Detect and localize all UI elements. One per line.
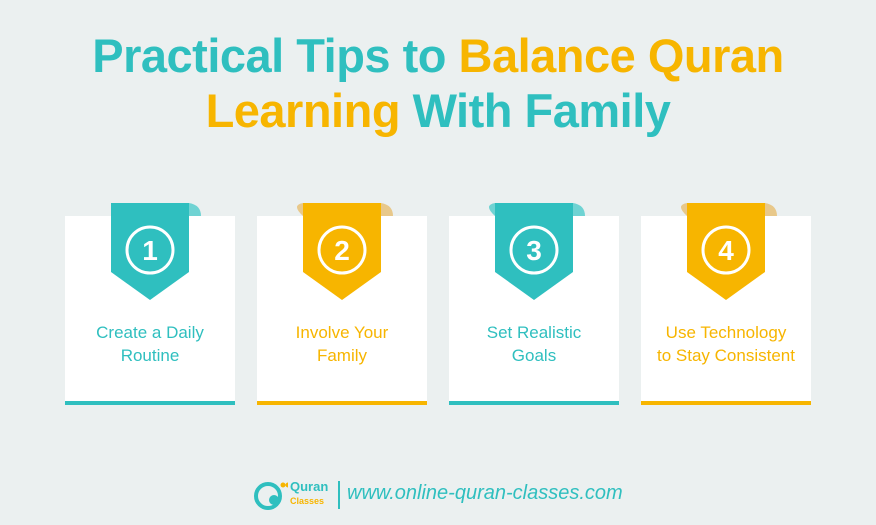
logo text: Classes [290, 496, 324, 506]
ribbon 2: 2 [334, 235, 350, 266]
card 4: to Stay Consistent [657, 346, 795, 365]
ribbon 3 [489, 203, 585, 300]
logo text [290, 479, 328, 506]
card 4 [641, 203, 811, 405]
url: www.online-quran-classes.com [347, 482, 623, 504]
card 2: Involve Your [296, 323, 388, 342]
card 1: Routine [121, 346, 179, 365]
card 1 [65, 203, 235, 405]
logo icon [254, 482, 288, 510]
card 3: Goals [512, 346, 556, 365]
logo text: Quran [290, 479, 328, 494]
card 2 [257, 203, 427, 405]
title: Practical Tips to Balance Quran [92, 29, 784, 82]
ribbon 4 [681, 203, 777, 300]
title: Learning With Family [206, 84, 670, 137]
title [92, 29, 784, 137]
card 3 [449, 203, 619, 405]
card 1: Create a Daily [96, 323, 204, 342]
footer logo and url [254, 479, 623, 510]
card 2: Family [317, 346, 367, 365]
card 3: Set Realistic [487, 323, 581, 342]
ribbon 3: 3 [526, 235, 542, 266]
card 4: Use Technology [666, 323, 786, 342]
ribbon 2 [297, 203, 393, 300]
ribbon 4: 4 [718, 235, 734, 266]
ribbon 1 [111, 203, 201, 300]
ribbon 1: 1 [142, 235, 158, 266]
